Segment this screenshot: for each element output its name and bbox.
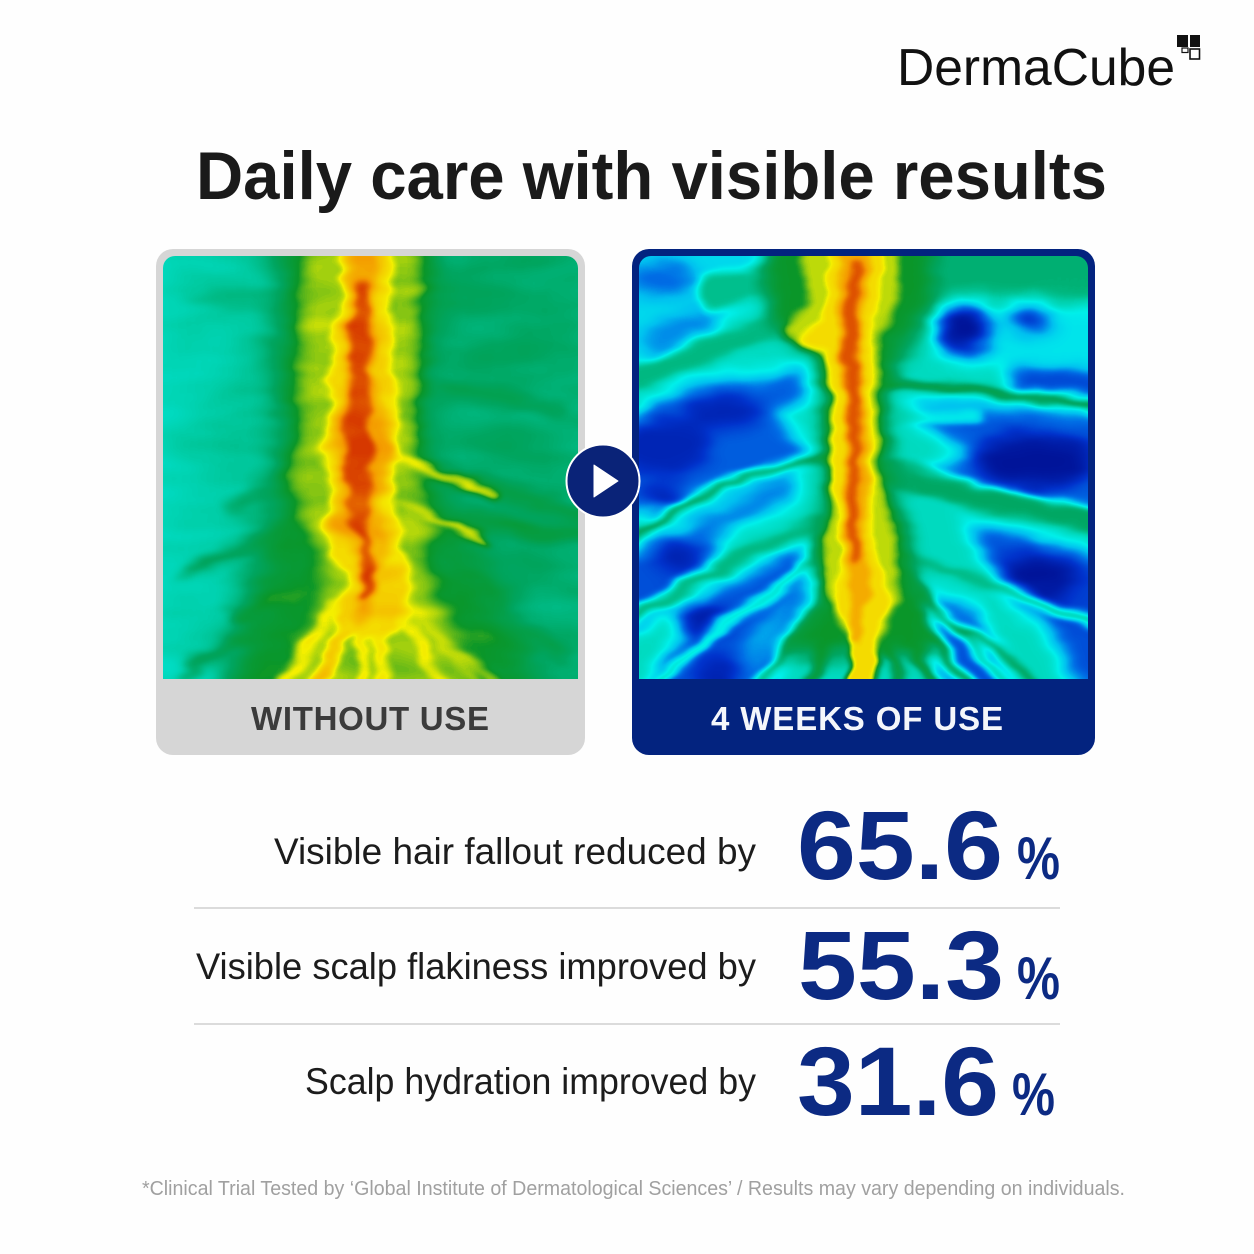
stat value: 55.3 [798,911,1004,1020]
label: 4 weeks of use: 4 WEEKS OF USE [711,700,1003,737]
stat label: Visible hair fallout reduced by [274,831,756,872]
logo wordmark: DermaCube [897,39,1175,97]
stat value: 65.6 [797,791,1003,900]
stat label: Scalp hydration improved by [305,1061,756,1102]
heatmap: without use [163,256,578,679]
panel: 4 weeks of use [632,249,1095,755]
logo icon: cubes [1177,35,1200,59]
footnote: *Clinical Trial Tested by ‘Global Institute of Dermatological Sciences’ / Results may vary depending on individuals. [142,1178,1125,1200]
panel: without use [156,249,585,755]
stat label: Visible scalp flakiness improved by [196,946,756,987]
panel frame [156,249,585,755]
stat value: 31.6 [797,1027,999,1136]
stat: scalp hydration [305,1027,1055,1136]
label: without use: WITHOUT USE [251,700,489,737]
title: Daily care with visible results [196,138,1107,214]
stat percent: % [1017,945,1060,1012]
heatmap: 4 weeks of use [639,256,1088,679]
icon: play arrow button [566,444,640,518]
logo: DermaCube [897,35,1200,97]
stat: hair fallout [274,791,1060,900]
stat percent: % [1012,1061,1055,1128]
panel frame [632,249,1095,755]
stat percent: % [1017,825,1060,892]
stat: scalp flakiness [196,911,1060,1020]
